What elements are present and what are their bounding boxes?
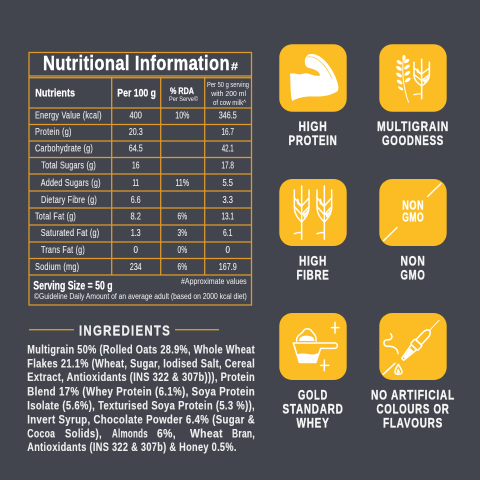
percent RDA column bbox=[175, 110, 189, 273]
icon: non gmo slash: GMO bbox=[402, 210, 424, 224]
nutrient names column: Saturated Fat (g) bbox=[41, 227, 99, 239]
ingredients text: Solids), bbox=[65, 428, 102, 440]
table header row: Per 50 g serving bbox=[207, 82, 249, 89]
nutrient names column: Dietary Fibre (g) bbox=[41, 194, 97, 206]
label: PROTEIN bbox=[288, 133, 338, 148]
ingredients text: Flakes 21.1% (Wheat, Sugar, Iodised Salt, Cereal bbox=[27, 358, 255, 370]
per 50 g serving column: 16.7 bbox=[221, 126, 234, 138]
per 50 g serving column: 346.5 bbox=[219, 110, 237, 122]
per 100 g column: 6.6 bbox=[131, 194, 141, 206]
title hash mark: # bbox=[231, 61, 238, 73]
label: WHEY bbox=[296, 415, 330, 430]
nutrient names column: Sodium (mg) bbox=[35, 261, 79, 273]
table header row bbox=[35, 82, 249, 107]
label: GOODNESS bbox=[382, 133, 444, 148]
per 100 g column: 8.2 bbox=[130, 210, 141, 222]
ingredients text: Cocoa bbox=[27, 428, 55, 440]
label: GMO bbox=[400, 268, 426, 283]
label bbox=[288, 119, 338, 148]
label: HIGH bbox=[298, 119, 328, 134]
nutrient names column bbox=[35, 110, 102, 273]
badge: high fibre bbox=[279, 179, 347, 283]
nutrient names column: Added Sugars (g) bbox=[41, 177, 101, 189]
ingredients text: Extract, Antioxidants (INS 322 & 307b))), Protein bbox=[27, 372, 255, 384]
per 50 g serving column: 167.9 bbox=[219, 261, 237, 273]
per 50 g serving column: 5.5 bbox=[222, 177, 233, 189]
percent RDA column: 3% bbox=[178, 227, 187, 239]
label: GOLD bbox=[298, 387, 328, 402]
icon: non gmo slash bbox=[379, 179, 447, 246]
per 100 g column bbox=[129, 110, 143, 273]
per 100 g column: 400 bbox=[129, 110, 142, 122]
table header row: of cow milk^ bbox=[213, 100, 247, 107]
label: STANDARD bbox=[282, 401, 344, 416]
per 100 g column: 64.5 bbox=[129, 142, 143, 154]
per 50 g serving column: 6.1 bbox=[223, 227, 233, 239]
per 100 g column: 0 bbox=[133, 244, 138, 256]
label: FLAVOURS bbox=[383, 415, 443, 430]
per 100 g column: 11 bbox=[132, 177, 139, 189]
panel: nutrition table bbox=[29, 52, 252, 305]
badge: multigrain goodness bbox=[377, 44, 449, 148]
icon: two wheat ears bbox=[279, 179, 347, 246]
ingredients text: Almonds bbox=[112, 428, 148, 440]
icon: flexed bicep bbox=[279, 44, 347, 112]
ingredients text: Isolate (5.6%), Texturised Soya Protein (5.3 %)), bbox=[27, 400, 255, 412]
table header row: % RDA bbox=[170, 86, 194, 97]
badge: high protein bbox=[279, 44, 347, 148]
approximate values note: #Approximate values bbox=[181, 276, 247, 286]
ingredients text: Bran, bbox=[232, 428, 255, 440]
label: NO ARTIFICIAL bbox=[371, 387, 455, 402]
per 50 g serving column: 3.3 bbox=[222, 194, 233, 206]
label bbox=[371, 387, 455, 430]
table header row: Per 100 g bbox=[117, 88, 156, 100]
ingredients text: Blend 17% (Whey Protein (6.1%), Soya Protein bbox=[27, 386, 255, 398]
table header row: Per Serve© bbox=[169, 96, 199, 103]
nutrient names column: Carbohydrate (g) bbox=[35, 142, 93, 154]
percent RDA column: 6% bbox=[178, 261, 187, 273]
percent RDA column: 10% bbox=[175, 110, 189, 122]
nutrient names column: Protein (g) bbox=[35, 126, 72, 138]
nutrient names column: Total Fat (g) bbox=[35, 210, 76, 222]
ingredients text: Wheat bbox=[190, 428, 223, 440]
label: HIGH bbox=[299, 254, 327, 269]
ingredients text: 6%, bbox=[157, 428, 176, 440]
ingredients text: Invert Syrup, Chocolate Powder 6.4% (Sugar & bbox=[27, 414, 255, 426]
label: FIBRE bbox=[296, 268, 330, 283]
guideline footnote: ©Guideline Daily Amount of an average adult (based on 2000 kcal diet) bbox=[34, 292, 247, 301]
ingredients text: Antioxidants (INS 322 & 307b) & Honey 0.5%. bbox=[27, 442, 237, 454]
serving size: Serving Size = 50 g bbox=[33, 280, 113, 292]
panel: ingredients bbox=[27, 323, 255, 454]
per 50 g serving column: 13.1 bbox=[221, 210, 234, 222]
nutrient names column: Trans Fat (g) bbox=[41, 244, 85, 256]
title: Nutritional Information bbox=[43, 52, 230, 75]
per 50 g serving column: 42.1 bbox=[222, 142, 234, 154]
nutrient names column: Total Sugars (g) bbox=[41, 160, 96, 172]
ingredients text: Multigrain 50% (Rolled Oats 28.9%, Whole Wheat bbox=[27, 344, 255, 356]
label bbox=[282, 387, 344, 430]
percent RDA column: 11% bbox=[176, 177, 189, 189]
per 100 g column: 234 bbox=[130, 261, 142, 273]
table header row: with 200 ml bbox=[210, 91, 246, 98]
badge: no artificial colours or flavours bbox=[371, 313, 455, 430]
label: COLOURS OR bbox=[376, 401, 450, 416]
badge: gold standard whey bbox=[279, 313, 347, 430]
per 100 g column: 16 bbox=[132, 160, 140, 172]
label: MULTIGRAIN bbox=[377, 119, 449, 134]
per 100 g column: 20.3 bbox=[129, 126, 143, 138]
label bbox=[377, 119, 449, 148]
per 50 g serving column: 17.8 bbox=[221, 160, 234, 172]
label: NON bbox=[400, 254, 426, 269]
label bbox=[400, 254, 426, 283]
badge: non gmo bbox=[379, 179, 447, 283]
icon: grain sprig and wheat bbox=[379, 44, 447, 112]
icon: dropper bbox=[379, 313, 447, 380]
per 100 g column: 1.3 bbox=[131, 227, 141, 239]
percent RDA column: 0% bbox=[178, 244, 187, 256]
per 50 g serving column bbox=[219, 110, 237, 273]
table header row: Nutrients bbox=[35, 88, 75, 100]
per 50 g serving column: 0 bbox=[225, 244, 230, 256]
icon: whey scoop bbox=[279, 313, 347, 380]
icon: non gmo slash: NON bbox=[402, 198, 424, 212]
table grid bbox=[29, 52, 252, 305]
percent RDA column: 6% bbox=[178, 210, 187, 222]
nutrient names column: Energy Value (kcal) bbox=[35, 110, 102, 122]
ingredients text bbox=[27, 344, 255, 454]
label bbox=[296, 254, 330, 283]
ingredients heading: INGREDIENTS bbox=[79, 323, 171, 340]
